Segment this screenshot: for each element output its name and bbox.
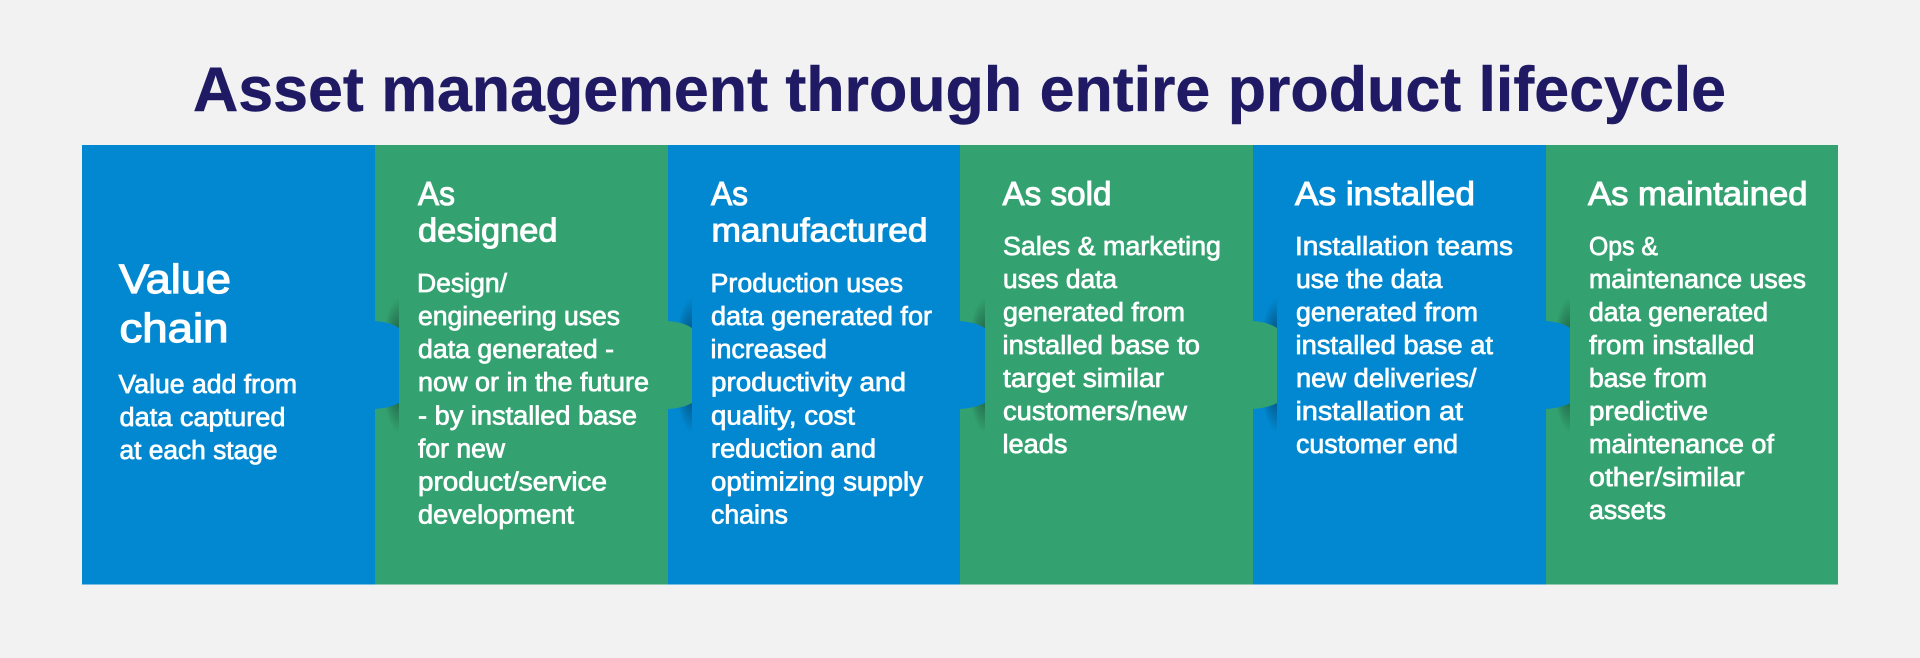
heading: as designed	[418, 175, 558, 248]
text: as sold description: installed base to	[1002, 332, 1200, 360]
text: as designed description: now or in the future	[418, 369, 649, 397]
text: as installed description: installation at	[1296, 398, 1463, 426]
text: as installed description: new deliveries/	[1296, 365, 1477, 393]
heading: as manufactured: manufactured	[712, 212, 928, 248]
text: as designed description: for new	[418, 436, 506, 464]
heading: value chain: Value	[119, 256, 231, 302]
arrow: connector from value chain	[375, 321, 399, 409]
heading: as designed: designed	[418, 212, 558, 248]
text: value chain description: at each stage	[120, 437, 278, 465]
text: as designed description: product/service	[418, 468, 607, 496]
text: as maintained description: base from	[1589, 365, 1707, 393]
text: as sold description	[1002, 233, 1221, 459]
text: as sold description: customers/new	[1003, 398, 1188, 426]
text: as installed description: use the data	[1296, 266, 1443, 294]
text: as maintained description: predictive	[1589, 398, 1708, 426]
text: as manufactured description	[710, 270, 933, 530]
text: as designed description: - by installed base	[418, 402, 637, 430]
text: as manufactured description: chains	[711, 502, 788, 530]
heading: as maintained: As maintained	[1588, 175, 1808, 212]
heading: as manufactured: As	[711, 175, 748, 212]
text: as manufactured description: quality, cost	[711, 402, 855, 430]
panel: as sold	[960, 145, 1253, 584]
text: as sold description: target similar	[1003, 365, 1165, 393]
text: as maintained description: assets	[1589, 497, 1666, 525]
heading: as designed: As	[418, 175, 455, 212]
text: as maintained description: maintenance uses	[1589, 266, 1806, 294]
text: as designed description: Design/	[417, 270, 508, 298]
text: as manufactured description: productivity and	[711, 369, 906, 397]
text: as installed description: installed base at	[1296, 332, 1493, 360]
arrow: connector from as manufactured	[960, 321, 985, 409]
text: as designed description: engineering uses	[418, 303, 620, 331]
text: as maintained description: data generated	[1589, 299, 1768, 327]
text: as manufactured description: reduction and	[711, 436, 876, 464]
text: as maintained description: from installed	[1589, 332, 1754, 360]
heading: as installed: As installed	[1295, 175, 1475, 212]
heading: as manufactured	[711, 175, 928, 248]
text: as maintained description	[1589, 233, 1806, 525]
text: as installed description	[1295, 233, 1513, 459]
text: as designed description: development	[418, 502, 574, 530]
heading: value chain: chain	[120, 305, 228, 351]
panel: value chain	[82, 145, 375, 584]
heading: value chain	[119, 256, 231, 351]
text: as sold description: leads	[1002, 431, 1068, 459]
arrow: connector from as designed	[668, 321, 692, 409]
panel: as maintained	[1546, 145, 1838, 584]
panel: as designed	[375, 145, 668, 584]
text: as installed description: Installation teams	[1295, 233, 1513, 261]
heading: as sold: As sold	[1002, 175, 1112, 212]
text: value chain description	[118, 371, 297, 465]
text: as designed description	[417, 270, 649, 530]
arrow: connector from as sold	[1253, 321, 1277, 409]
text: as sold description: Sales & marketing	[1003, 233, 1221, 261]
text: value chain description: Value add from	[118, 371, 297, 399]
text: as sold description: uses data	[1003, 266, 1118, 294]
text: as maintained description: Ops &	[1589, 233, 1658, 261]
text: as maintained description: other/similar	[1589, 464, 1745, 492]
text: as sold description: generated from	[1003, 299, 1185, 327]
panel: as installed	[1253, 145, 1546, 584]
text: as designed description: data generated -	[418, 336, 614, 364]
text: as installed description: customer end	[1296, 431, 1458, 459]
text: value chain description: data captured	[120, 404, 286, 432]
text: as manufactured description: Production uses	[710, 270, 903, 298]
text: as manufactured description: optimizing supply	[711, 468, 923, 496]
arrow: connector from as installed	[1546, 321, 1570, 409]
title: Asset management through entire product lifecycle	[193, 55, 1726, 125]
text: as installed description: generated from	[1296, 299, 1478, 327]
text: as manufactured description: data generated for	[711, 303, 933, 331]
panel: as manufactured	[668, 145, 960, 584]
text: as manufactured description: increased	[710, 336, 827, 364]
text: as maintained description: maintenance of	[1589, 431, 1775, 459]
